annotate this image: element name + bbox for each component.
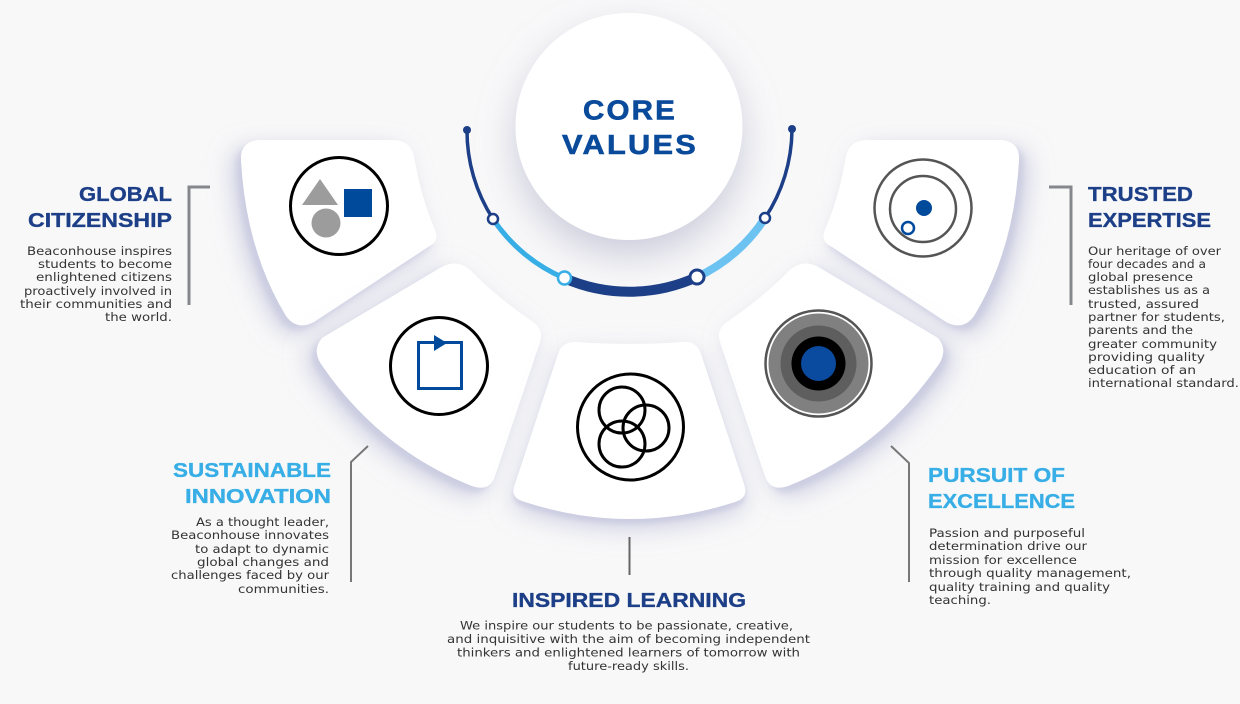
text block: global citizenship: enlightened citizens [36,270,172,284]
panel: inspired learning card [513,342,745,519]
text block: global citizenship: their communities and [20,297,172,311]
text block: trusted expertise: international standard. [1088,376,1239,390]
text block: trusted expertise: EXPERTISE [1088,209,1211,232]
title: core values: VALUES [562,129,698,160]
text block: inspired learning: INSPIRED LEARNING [512,589,746,612]
text block: pursuit of excellence: determination drive our [929,539,1087,553]
connector: sustainable innovation [351,446,368,582]
text block: trusted expertise [1088,183,1239,390]
icon: shapes [290,158,388,254]
connector: inspired learning [628,537,630,575]
text block: trusted expertise: TRUSTED [1088,183,1193,206]
arc timeline [463,125,796,292]
panel: pursuit of excellence card [719,263,943,488]
text block: pursuit of excellence: EXCELLENCE [928,490,1075,513]
text block: global citizenship: CITIZENSHIP [28,209,172,232]
text block: global citizenship [20,183,172,324]
text block: trusted expertise: global presence [1088,270,1193,284]
text block: trusted expertise: establishes us as a [1088,283,1210,297]
text block: global citizenship: proactively involved in [24,284,172,298]
text block: trusted expertise: education of an [1088,363,1196,377]
text block: pursuit of excellence: quality training and quality [929,580,1110,594]
connector: trusted expertise [1049,187,1071,305]
text block: sustainable innovation [171,459,331,596]
title: core values: CORE [583,94,677,126]
icon: orbit [874,160,972,256]
text block: sustainable innovation: Beaconhouse innovates [171,528,329,542]
icon: target [766,310,872,416]
text block: pursuit of excellence: through quality management, [929,566,1131,580]
text block: inspired learning: We inspire our students to be passionate, creative, [460,618,793,632]
text block: pursuit of excellence: PURSUIT OF [928,464,1065,487]
text block: trusted expertise: Our heritage of over [1088,244,1221,258]
title: core values [562,94,698,160]
text block: inspired learning [447,589,811,673]
panel: sustainable innovation card [317,263,541,488]
panel: global citizenship card [241,140,436,325]
text block: trusted expertise: partner for students, [1088,310,1225,324]
text block: trusted expertise: parents and the [1088,323,1193,337]
text block: sustainable innovation: global changes and [197,555,329,569]
connector: global citizenship [189,187,210,305]
icon: overlapping circles [578,374,684,480]
text block: trusted expertise: trusted, assured [1088,297,1199,311]
text block: sustainable innovation: communities. [238,582,329,596]
text block: global citizenship: Beaconhouse inspires [27,244,172,258]
text block: inspired learning: thinkers and enlightened learners of tomorrow with [457,646,800,660]
text block: sustainable innovation: challenges faced by our [171,568,329,582]
panel: trusted expertise card [824,140,1019,325]
text block: sustainable innovation: to adapt to dynamic [195,542,329,556]
text block: pursuit of excellence: Passion and purposeful [929,526,1085,540]
text block: inspired learning: and inquisitive with the aim of becoming independent [447,632,811,646]
text block: trusted expertise: greater community [1088,337,1217,351]
text block: sustainable innovation: As a thought leader, [196,515,329,529]
text block: pursuit of excellence: teaching. [929,593,991,607]
text block: pursuit of excellence [928,464,1131,607]
text block: global citizenship: students to become [38,257,172,271]
icon: square with arrow [390,318,488,414]
text block: global citizenship: GLOBAL [79,183,172,206]
connector: pursuit of excellence [891,446,909,582]
core values circle [516,13,742,240]
text block: sustainable innovation: SUSTAINABLE [173,459,331,482]
text block: trusted expertise: four decades and a [1088,257,1206,271]
text block: pursuit of excellence: mission for excellence [929,553,1077,567]
text block: trusted expertise: providing quality [1088,350,1205,364]
text block: inspired learning: future-ready skills. [568,659,689,673]
text block: global citizenship: the world. [105,310,172,324]
text block: sustainable innovation: INNOVATION [185,485,331,508]
